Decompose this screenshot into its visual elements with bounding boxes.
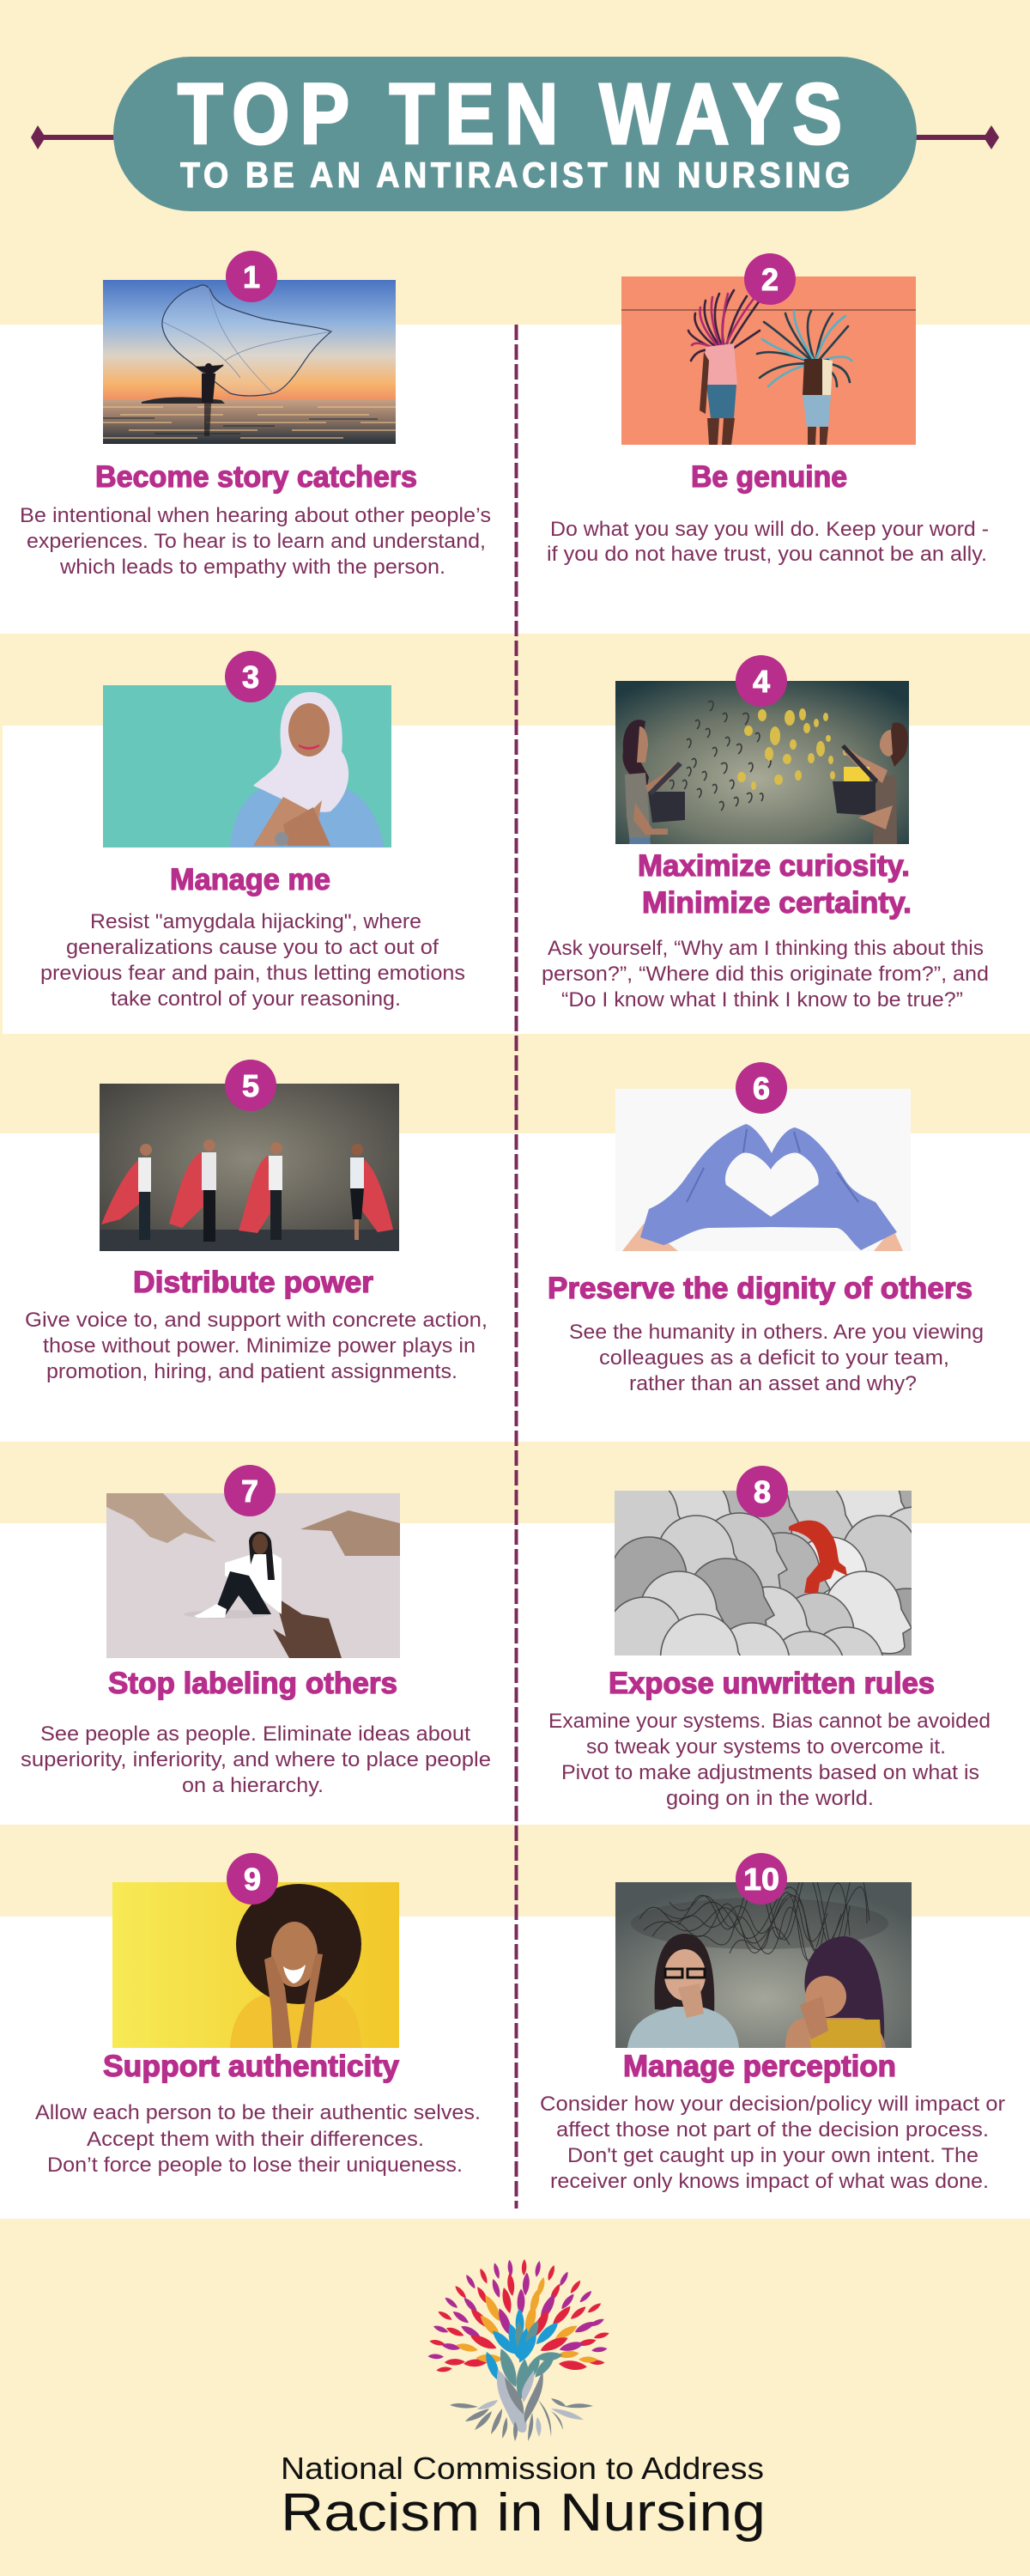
panel: way 6 <box>548 1062 984 1395</box>
number badge 9 <box>227 1853 278 1905</box>
photo: laughing woman on yellow background <box>112 1882 399 2048</box>
description: which leads to empathy with the person. <box>59 556 445 579</box>
description: Don’t force people to lose their uniqueness. <box>47 2154 463 2177</box>
description <box>35 2101 481 2177</box>
photo: women with boxes of questions and light bulbs <box>615 681 909 844</box>
number badge 2 <box>744 253 796 305</box>
heading: Support authenticity <box>103 2050 400 2083</box>
panel: way 10 <box>540 1853 1005 2193</box>
description <box>542 937 989 1012</box>
number badge 8 <box>736 1466 788 1517</box>
heading: Minimize certainty. <box>642 886 912 920</box>
right connector with diamond <box>915 125 999 149</box>
number badge 4 <box>736 655 787 707</box>
number badge 1 <box>226 251 277 302</box>
panel: way 3 <box>40 651 465 1011</box>
photo: people in red capes against concrete wall <box>100 1084 399 1251</box>
organization name line 1: National Commission to Address <box>281 2451 764 2486</box>
description: those without power. Minimize power plays in <box>43 1334 476 1358</box>
left connector with diamond <box>31 125 115 149</box>
heading: Be genuine <box>691 460 847 494</box>
description: Ask yourself, “Why am I thinking this about this <box>548 937 984 960</box>
description <box>547 518 989 566</box>
heading: Manage me <box>170 863 330 896</box>
description: Accept them with their differences. <box>87 2128 424 2151</box>
photo: gloved hands forming a heart <box>615 1089 911 1251</box>
number badge 4: 4 <box>753 664 770 699</box>
description <box>40 910 465 1011</box>
number badge 7 <box>224 1465 276 1516</box>
number badge 7: 7 <box>241 1473 258 1509</box>
description: previous fear and pain, thus letting emotions <box>40 962 465 985</box>
title banner <box>31 57 999 211</box>
description: Be intentional when hearing about other people’s <box>20 504 491 527</box>
description: Examine your systems. Bias cannot be avoided <box>548 1710 991 1733</box>
icon: tree with colourful leaves and roots <box>427 2259 609 2441</box>
number badge 6 <box>736 1062 787 1114</box>
number badge 5: 5 <box>242 1068 259 1103</box>
description: person?”, “Where did this originate from?”, and <box>542 963 989 986</box>
description <box>20 504 491 579</box>
panel: way 8 <box>548 1455 991 1810</box>
illustration: hands pointing at seated woman <box>106 1493 400 1658</box>
description: generalizations cause you to act out of <box>66 936 439 959</box>
photo: casting a net at sunset <box>103 280 396 444</box>
number badge 8: 8 <box>754 1474 771 1510</box>
panel: way 7 <box>21 1465 491 1797</box>
description: receiver only knows impact of what was done. <box>550 2170 989 2193</box>
description: See the humanity in others. Are you viewing <box>569 1321 984 1344</box>
description: superiority, inferiority, and where to place people <box>21 1748 491 1771</box>
heading: Stop labeling others <box>108 1667 397 1700</box>
panel: way 1 <box>20 251 491 579</box>
number badge 5 <box>225 1060 276 1111</box>
description: Resist "amygdala hijacking", where <box>90 910 421 933</box>
photo: two worried women with scribbled thoughts <box>615 1882 912 2048</box>
organization name line 2: Racism in Nursing <box>281 2483 766 2543</box>
panel: way 5 <box>25 1060 488 1383</box>
number badge 6: 6 <box>753 1071 770 1106</box>
description <box>548 1710 991 1810</box>
description: colleagues as a deficit to your team, <box>599 1346 949 1370</box>
number badge 1: 1 <box>243 259 260 295</box>
number badge 10: 10 <box>743 1862 779 1897</box>
teal pill <box>113 57 917 211</box>
panel: way 9 <box>35 1853 481 2177</box>
description: experiences. To hear is to learn and understand, <box>27 530 486 553</box>
description: Pivot to make adjustments based on what is <box>561 1761 979 1784</box>
description <box>569 1321 984 1395</box>
heading: Become story catchers <box>95 460 417 494</box>
number badge 2: 2 <box>761 262 779 297</box>
description: promotion, hiring, and patient assignments. <box>46 1360 457 1383</box>
description: so tweak your systems to overcome it. <box>586 1735 946 1759</box>
description: Don't get caught up in your own intent. The <box>567 2144 978 2167</box>
photo: crumpled paper heads with one red head <box>615 1491 912 1656</box>
description: take control of your reasoning. <box>111 987 401 1011</box>
description: going on in the world. <box>666 1787 874 1810</box>
description: Consider how your decision/policy will impact or <box>540 2093 1005 2116</box>
panel: way 4 <box>542 655 989 1012</box>
subtitle: TO BE AN ANTIRACIST IN NURSING <box>180 155 854 195</box>
description: See people as people. Eliminate ideas about <box>40 1722 470 1746</box>
heading <box>638 849 912 920</box>
description <box>21 1722 491 1797</box>
panel: way 2 <box>547 253 989 566</box>
description: “Do I know what I think I know to be true?” <box>561 988 963 1012</box>
number badge 10 <box>736 1853 787 1905</box>
description: Allow each person to be their authentic selves. <box>35 2101 481 2124</box>
description: affect those not part of the decision process. <box>556 2118 989 2142</box>
description <box>540 2093 1005 2193</box>
heading: Distribute power <box>133 1266 373 1299</box>
description: if you do not have trust, you cannot be an ally. <box>547 543 987 566</box>
main title: TOP TEN WAYS <box>178 66 852 162</box>
heading: Expose unwritten rules <box>609 1667 935 1700</box>
heading: Preserve the dignity of others <box>548 1272 972 1305</box>
heading: Maximize curiosity. <box>638 849 910 883</box>
photo: nurse in hijab <box>103 685 391 848</box>
description: rather than an asset and why? <box>629 1372 917 1395</box>
footer logo: National Commission to Address Racism in Nursing <box>281 2259 766 2543</box>
description <box>25 1309 488 1383</box>
photo: two women flipping braids <box>621 276 916 445</box>
description: on a hierarchy. <box>182 1774 324 1797</box>
number badge 3 <box>225 651 276 702</box>
description: Do what you say you will do. Keep your word - <box>550 518 989 541</box>
heading: Manage perception <box>623 2050 896 2083</box>
number badge 3: 3 <box>242 659 259 695</box>
number badge 9: 9 <box>244 1862 261 1897</box>
description: Give voice to, and support with concrete action, <box>25 1309 488 1332</box>
